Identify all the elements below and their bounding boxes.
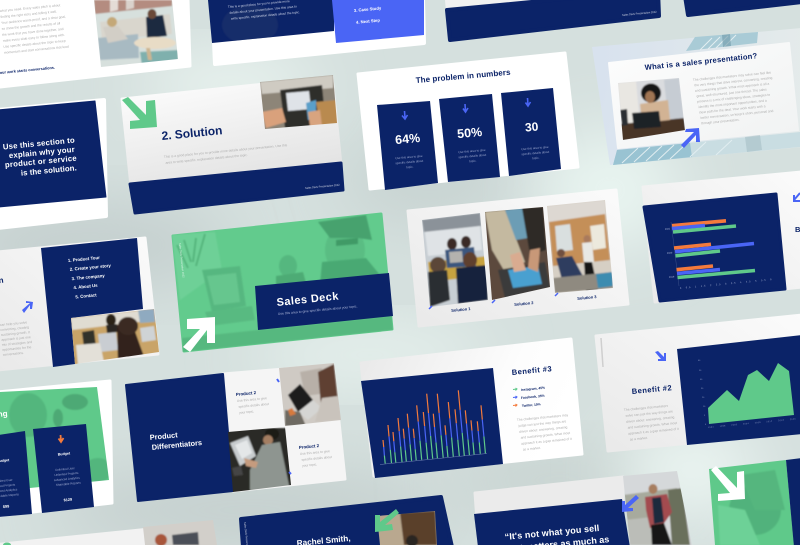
- axis ticks: 50: [699, 370, 702, 372]
- block Product 2 top: [236, 390, 270, 415]
- body: specific details about: [301, 455, 332, 462]
- plan features: Unlimited Projects: [54, 471, 79, 477]
- body text: Use specific details about the topic to keep: [3, 39, 66, 49]
- axis ticks: [698, 360, 797, 429]
- label Solution 2: Solution 2: [514, 300, 534, 307]
- heading: Product 2: [299, 443, 320, 450]
- body text: as a market.: [523, 446, 541, 452]
- photo: laptop on desk: [279, 363, 341, 426]
- body: Use this area to give: [300, 449, 330, 456]
- body text: clear path for the deal. Your work starts with a: [699, 104, 766, 115]
- legend Facebook: Facebook, 35%: [521, 394, 545, 400]
- plan name: Budget: [58, 451, 71, 457]
- bold closing line: our work starts conversations.: [0, 66, 55, 75]
- body text: so show the growth and the results of all: [1, 21, 61, 31]
- light panel sliver: [445, 0, 560, 12]
- slide: bottom-left with photo: [0, 518, 218, 545]
- icon: arrow down: [526, 98, 530, 106]
- chart axis labels: 2021: [665, 227, 671, 231]
- icon: blue arrow: [622, 495, 639, 512]
- body text: converting, creating: [0, 325, 29, 332]
- axis ticks: 5: [704, 415, 706, 417]
- footer caption: Sales Deck Presentation 2022: [622, 10, 657, 17]
- icon: arrow down: [402, 111, 408, 119]
- agenda list: 2. Create your story: [69, 263, 112, 272]
- body text: what you need. Every sales pitch is about: [0, 3, 61, 13]
- legend Twitter: Twitter, 15%: [522, 402, 541, 408]
- navy panel: [241, 497, 452, 545]
- body text: identify the most important opportunities, and a: [698, 99, 767, 109]
- icon: blue arrow: [794, 193, 800, 201]
- statement text: [2, 136, 78, 178]
- body text: opportunities for the: [2, 345, 32, 352]
- title: Sales Deck: [276, 290, 340, 309]
- slide: Sales Deck cover: [172, 214, 393, 352]
- photo: monitor: [143, 520, 217, 545]
- agenda items: 3. Case Study: [354, 5, 382, 13]
- slide panel: [358, 53, 578, 189]
- stat caption: topic.: [406, 165, 414, 169]
- body text: mix of strategies and: [2, 340, 32, 347]
- stat caption: Use this area to give: [458, 148, 486, 154]
- navy title box: [255, 273, 393, 330]
- body text: driven about: answering, creating: [519, 425, 568, 434]
- body: your topic.: [239, 409, 254, 415]
- body text: sustaining growth. It: [1, 330, 30, 337]
- axis ticks: 0: [705, 424, 707, 426]
- body text: approach is just one: [1, 335, 31, 342]
- intro text: details about your presentation. Use this area to: [229, 4, 297, 15]
- navy chart panel: [677, 335, 800, 445]
- building image strip bottom: [613, 132, 800, 165]
- agenda list: 5. Contact: [75, 292, 97, 299]
- body text: and sustaining growth. What most approach is all a: [695, 82, 770, 93]
- plan features: Shareable Reports: [56, 481, 81, 487]
- axis ticks: 20: [702, 397, 705, 399]
- slide: Rachel Smith profile: [241, 497, 452, 545]
- slide panel: [475, 477, 623, 520]
- icon: green marker: [3, 542, 11, 545]
- stat caption: Use this area to give: [521, 145, 549, 151]
- body text: The challenges that marketers may: [517, 413, 569, 422]
- icon: blue arrow: [681, 128, 700, 148]
- statement text: Use this section to: [2, 136, 75, 151]
- axis ticks: 1994 1996 2000 2004 2008 2012 2016 2020: [708, 418, 797, 429]
- navy panel: [41, 238, 143, 367]
- body: specific details about: [238, 402, 269, 409]
- stat caption: specific details about: [395, 159, 424, 165]
- stat column 64%: [377, 101, 438, 190]
- icon: arrow down: [463, 104, 468, 112]
- slide: the problem in numbers: [358, 53, 578, 190]
- navy panel: [208, 0, 334, 45]
- photo: hands on laptop: [485, 207, 550, 300]
- photo: team around laptop: [422, 213, 488, 307]
- photo: man on phone: [623, 471, 692, 545]
- chart axis labels: 2020: [667, 251, 673, 255]
- slide panel: [408, 190, 628, 326]
- slide: agenda top centre: [208, 0, 424, 64]
- stat value: 50%: [457, 125, 483, 141]
- body text: through your presentation.: [701, 118, 740, 125]
- footer caption: Sales Deck Presentation 2022: [305, 183, 340, 190]
- slide: top-left article with meeting photo: [0, 0, 190, 87]
- quote text: “It's not what you sell: [504, 523, 600, 542]
- chart axis labels: 0 0.5 1 1.5 2 2.5 3 3.5 4 4.5 5 5.5 6: [680, 278, 772, 290]
- icon: green arrow: [122, 97, 157, 129]
- plan features: Advanced Analytics: [54, 476, 80, 482]
- body text: Your audience wants proof, and a clear goal,: [1, 15, 66, 25]
- slide panel: [0, 100, 106, 228]
- statement text: explain why your: [8, 145, 75, 160]
- body: your topic.: [302, 462, 317, 468]
- slide panel: [0, 0, 190, 87]
- chart axis labels: 2019: [669, 275, 675, 279]
- slide panel: [212, 0, 424, 64]
- slide: agenda with photo: [0, 238, 162, 370]
- body text: and sustaining growth. What most: [627, 421, 677, 430]
- axis ticks: 60: [698, 360, 701, 362]
- slide: top-right navy corner: [685, 0, 800, 15]
- plan features: ced Analytics: [0, 487, 18, 493]
- slide: bar chart right: [643, 172, 800, 302]
- body text: the very things that drive interest, converting, creating: [694, 76, 773, 87]
- body: Use this area to give: [237, 396, 267, 403]
- horizontal bar chart: [671, 221, 755, 286]
- body text: solve can just the way things are: [625, 409, 673, 418]
- axis ticks: 40: [700, 379, 703, 381]
- navy footer: [447, 0, 659, 40]
- building image strip top: [686, 32, 758, 51]
- navy panel: [126, 374, 233, 501]
- area chart: [708, 363, 794, 424]
- stat column 50%: [439, 94, 500, 182]
- slide panel: [596, 315, 800, 451]
- body text: approach it as a gap remained of it: [521, 437, 572, 446]
- icon: blue arrow: [22, 301, 33, 313]
- icon: green arrow: [375, 509, 399, 532]
- body text: momentum and start conversations that lead: [4, 45, 69, 55]
- navy panel: [0, 101, 106, 207]
- stat caption: topic.: [532, 156, 540, 160]
- plan price: $129: [64, 498, 72, 502]
- label Solution 1: Solution 1: [451, 306, 471, 313]
- slide panel: [643, 172, 800, 302]
- stat value: 30: [524, 119, 539, 135]
- slide: top navy footer: [445, 0, 659, 40]
- title: Product: [149, 430, 179, 442]
- icon: small blue arrows: [277, 379, 291, 474]
- heading: Product 2: [236, 390, 257, 397]
- title: 2. Solution: [161, 123, 223, 143]
- stat caption: topic.: [469, 159, 477, 163]
- statement text: is the solution.: [20, 163, 77, 178]
- body text: great, well-structured, just one thread. The sales: [696, 87, 767, 98]
- slide panel: [122, 77, 341, 186]
- plan features: dable Reports: [0, 492, 20, 498]
- title: The problem in numbers: [415, 68, 511, 85]
- navy side panel: [786, 458, 800, 545]
- statement text: product or service: [4, 154, 78, 169]
- agenda items: 4. Next Step: [356, 18, 381, 25]
- slide: pricing plans: [0, 381, 113, 517]
- body text: conversations.: [3, 351, 24, 357]
- agenda list: 3. The company: [71, 273, 105, 281]
- body text: area to write specific, explanation details about the topic.: [165, 153, 248, 165]
- body text: the work that you have done together, and: [2, 27, 64, 37]
- slide panel: [0, 528, 145, 545]
- icon: orange arrow: [58, 435, 64, 442]
- slide: bottom right green photo: [705, 458, 800, 545]
- green photo header: [0, 387, 109, 488]
- icon: white arrow: [711, 466, 745, 501]
- blue agenda panel: [332, 0, 424, 43]
- agenda list: 4. About Us: [73, 283, 98, 290]
- body text: approach it as a gap remained of it: [628, 427, 679, 436]
- green photo: [705, 458, 797, 545]
- stat caption: specific details about: [458, 153, 487, 159]
- photo: man typing: [226, 428, 294, 494]
- photo: office laptops: [71, 309, 159, 364]
- vertical caption mark: [601, 338, 603, 367]
- slide: product differentiators: [126, 360, 345, 501]
- body text: better conversation, so keep it short, personal and: [700, 109, 774, 120]
- plan features: Unlimited User: [55, 466, 75, 472]
- navy chart panel: [644, 194, 785, 301]
- body text: finding the right story and telling it well.: [0, 10, 57, 19]
- body text: The challenges that marketers may solve can feel like: [693, 70, 771, 82]
- plan column right: [33, 424, 94, 513]
- body text: This is a good place for you to provide more details about your presentation. Use this: [164, 143, 288, 159]
- subtitle: Use this area to give specific details about your topic.: [278, 304, 358, 316]
- icon: white arrow: [183, 317, 215, 352]
- stat caption: specific details about: [521, 150, 550, 156]
- intro text: write specific, explanation details about the topic.: [231, 10, 300, 21]
- stat caption: Use this area to give: [395, 154, 423, 160]
- navy footer: [130, 163, 343, 213]
- slide: three solutions photos: [408, 190, 628, 326]
- icon: small blue arrows: [429, 293, 558, 309]
- slide panel: [0, 381, 112, 516]
- body text: driven about: answering, creating: [626, 415, 675, 424]
- photo: office: [378, 511, 437, 545]
- icon: blue arrow: [655, 351, 666, 361]
- slide: benefit 2: [596, 315, 800, 451]
- slide panel: [0, 238, 158, 370]
- agenda list: 1. Product Tour: [68, 255, 100, 263]
- side caption: Sales Deck Presentation 2022: [178, 243, 186, 278]
- photo: woman at laptop: [618, 78, 685, 140]
- title: Benefit #3: [511, 364, 552, 377]
- body text: as a market.: [630, 436, 648, 442]
- label Solution 3: Solution 3: [577, 294, 597, 301]
- photo: people meeting on sofa: [94, 0, 178, 67]
- chart legend: [513, 386, 545, 408]
- body text: make every slide easy to follow along with.: [3, 33, 65, 43]
- plan price: $99: [3, 504, 9, 509]
- legend Instagram: Instagram, 45%: [521, 386, 545, 392]
- plan column left: [0, 431, 32, 517]
- photo: laptop and phone: [260, 75, 337, 129]
- stat value: 64%: [395, 131, 421, 147]
- body text: process is a mix of challenging ideas, strategies to: [697, 93, 771, 104]
- slide panel: [223, 365, 345, 491]
- slide panel: [361, 339, 582, 476]
- slide: benefit 3: [361, 339, 582, 478]
- title: What is a sales presentation?: [644, 51, 758, 72]
- slide: what is a sales presentation: [592, 28, 800, 165]
- photo: wooden office: [545, 198, 615, 294]
- green background photo: [172, 214, 393, 352]
- stat column 30: [501, 88, 561, 176]
- body text: and sustaining growth. What most: [520, 431, 570, 440]
- slide: solution statement: [0, 100, 106, 228]
- title: Differentiators: [151, 438, 202, 452]
- body text: The challenges that marketers: [624, 404, 669, 412]
- slide: quote: [474, 468, 696, 545]
- body text: judge can just the way things are: [517, 419, 567, 428]
- navy chart panel: [361, 368, 503, 478]
- white card: [609, 43, 798, 148]
- axis ticks: 10: [703, 406, 706, 408]
- outer tinted panel: [592, 28, 800, 165]
- navy quote panel: [474, 499, 630, 545]
- body text: can help you solve: [0, 320, 27, 327]
- slide: 2. Solution: [122, 72, 343, 213]
- chart axis labels: [665, 227, 772, 290]
- axis ticks: 30: [701, 388, 704, 390]
- title: Benefit #2: [631, 383, 672, 396]
- stacked bar chart: [380, 390, 487, 464]
- block Product 2 bottom: [299, 443, 333, 468]
